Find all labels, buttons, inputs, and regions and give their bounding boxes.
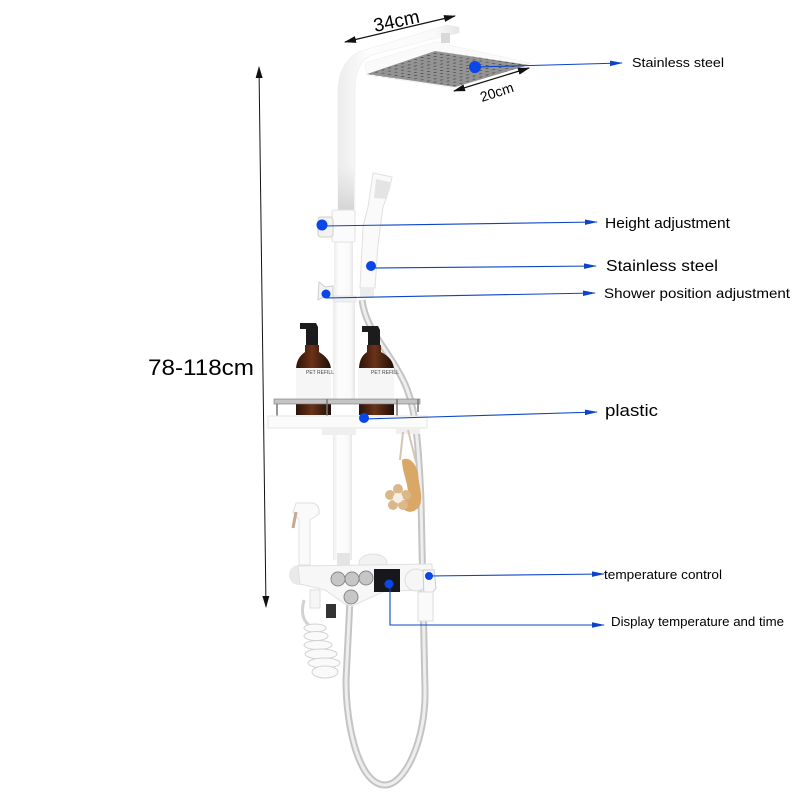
label: display temperature and time: Display temperature and time — [611, 614, 784, 629]
label: stainless steel hand shower: Stainless steel — [606, 258, 718, 275]
bottle left: PET REFILL — [306, 370, 334, 376]
bidet sprayer — [293, 503, 319, 565]
shower hose — [346, 300, 425, 785]
control panel — [289, 553, 436, 621]
callout dots — [316, 61, 481, 588]
label: 20cm: 20cm — [478, 79, 515, 105]
dimension arrow: 20cm — [454, 68, 529, 91]
shelf — [268, 399, 427, 435]
label: stainless steel head: Stainless steel — [632, 55, 724, 70]
label: temperature control: temperature control — [604, 567, 722, 582]
height adjustment collar — [318, 210, 355, 242]
dimension arrow: 34cm — [345, 16, 455, 42]
bottle right — [358, 326, 399, 415]
bottle right: PET REFILL — [371, 370, 399, 376]
shower head — [365, 33, 530, 88]
dimension arrow: height — [259, 67, 266, 607]
label: plastic: plastic — [605, 401, 659, 420]
hand shower — [360, 173, 392, 298]
coiled hose — [302, 600, 340, 678]
shower column — [333, 25, 459, 560]
bottle left — [296, 323, 334, 415]
shower position adjustment — [318, 282, 356, 302]
label: height adjustment: Height adjustment — [605, 216, 730, 232]
hanging flower brush — [385, 430, 421, 512]
label: 34cm: 34cm — [372, 7, 421, 37]
label: shower position adjustment: Shower position adjustment — [604, 285, 790, 301]
label: height range: 78-118cm — [148, 355, 254, 380]
callout lines — [322, 63, 622, 625]
